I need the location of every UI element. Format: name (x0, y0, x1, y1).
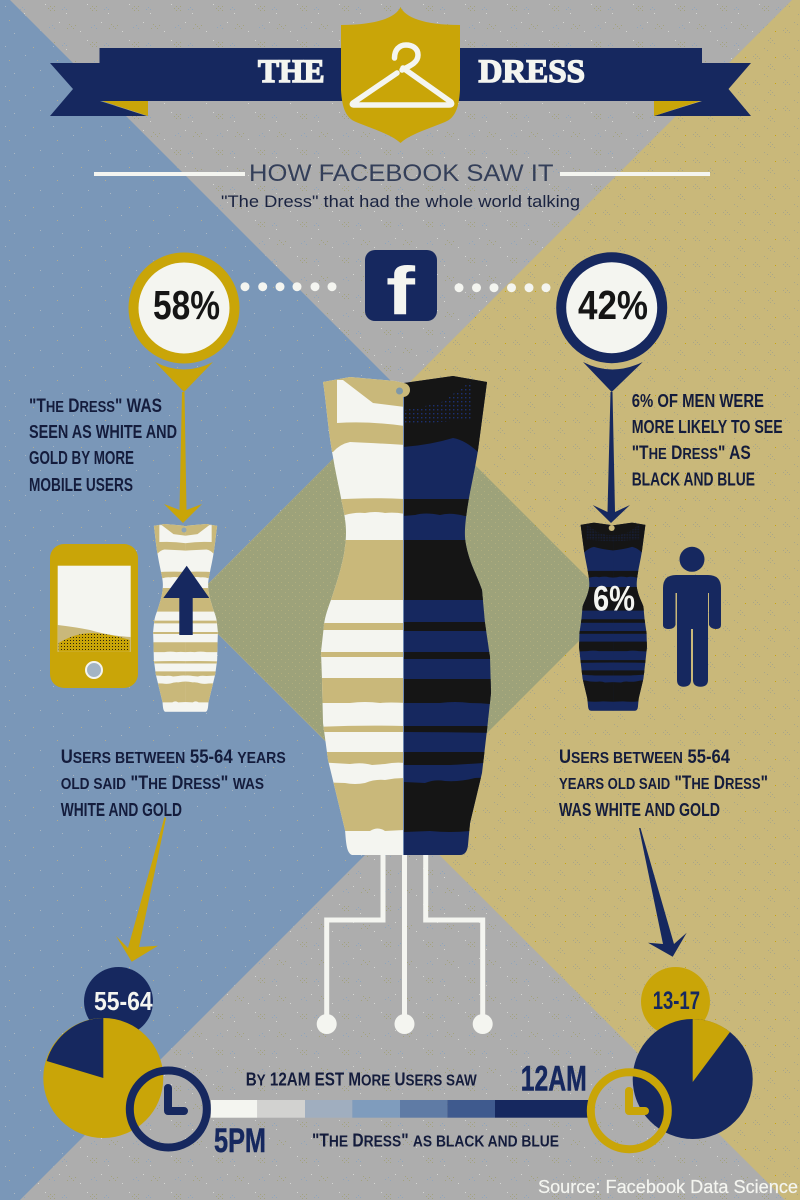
arrow: to 13-17 pie (639, 828, 687, 957)
text: users 55-64 right (559, 747, 768, 820)
arrow: to 55-64 pie (116, 817, 166, 962)
pie chart: 55-64 (43, 967, 163, 1138)
icon: man (663, 547, 721, 687)
text: mobile users: MOBILE USERS (29, 475, 133, 495)
text: users 55-64 left: OLD SAID "THE DRESS" WAS (61, 773, 264, 794)
clock: 5PM (130, 1070, 207, 1148)
icon: clothes hanger (352, 45, 452, 105)
text: mobile users: SEEN AS WHITE AND (29, 422, 177, 442)
text: men: 6% OF MEN WERE (632, 391, 764, 411)
dress stand legs (317, 855, 493, 1034)
timeline bar (211, 1100, 589, 1118)
label: 6 percent: 6% (593, 580, 635, 619)
age badge: 55-64: 55-64 (94, 986, 153, 1016)
text: users 55-64 right: YEARS OLD SAID "THE DRESS" (559, 773, 768, 794)
arrow: 58 percent to mobile dress (164, 392, 202, 523)
text: mobile users (29, 396, 177, 495)
title word: DRESS: DRESS (478, 54, 585, 90)
label: 12AM: 12AM (521, 1060, 587, 1099)
clock: 12AM (591, 1072, 668, 1149)
text: users 55-64 left: USERS BETWEEN 55-64 YEARS (61, 747, 286, 768)
age badge: 55-64 (84, 967, 153, 1036)
small dress: black and blue (576, 520, 650, 713)
label: 5PM: 5PM (214, 1122, 266, 1160)
dress right half (403, 370, 498, 860)
text: men (632, 391, 783, 490)
arrow: up (163, 566, 209, 635)
shield (341, 7, 460, 143)
text: men: "THE DRESS" AS (632, 443, 751, 464)
dotted connector left (240, 282, 336, 291)
heading: how facebook saw it: HOW FACEBOOK SAW IT (249, 160, 554, 187)
age badge: 13-17: 13-17 (653, 987, 700, 1015)
text: by 12am: BY 12AM EST MORE USERS SAW (246, 1070, 477, 1090)
main dress: half white and gold, half black and blue (315, 370, 498, 860)
pie chart: 13-17 (633, 967, 753, 1139)
text: mobile users: GOLD BY MORE (29, 448, 134, 468)
ribbon right tail (654, 63, 751, 116)
text: mobile users: "THE DRESS" WAS (29, 396, 162, 417)
text: users 55-64 right: WAS WHITE AND GOLD (559, 800, 720, 820)
dress left half (315, 370, 405, 860)
ribbon main band (100, 48, 702, 101)
ribbon left tail (50, 63, 147, 116)
text: the dress as black and blue: "THE DRESS" AS BLACK AND BLUE (312, 1131, 559, 1151)
source credit: Source: Facebook Data Science (538, 1177, 798, 1197)
ribbon folds (102, 101, 700, 116)
callout: 42 percent (561, 257, 662, 392)
callout: 58 percent: 58% (153, 282, 220, 328)
icon: facebook: f (386, 253, 415, 329)
text: men: BLACK AND BLUE (632, 470, 755, 490)
text: users 55-64 right: USERS BETWEEN 55-64 (559, 747, 730, 768)
age badge: 13-17 (641, 967, 710, 1036)
icon: facebook (365, 250, 437, 329)
title banner (50, 7, 751, 143)
callout: 58 percent (134, 258, 234, 392)
text: users 55-64 left (61, 747, 286, 820)
callout: 42 percent: 42% (578, 282, 648, 328)
subtitle: "The Dress" that had the whole world talking (221, 193, 580, 211)
text: users 55-64 left: WHITE AND GOLD (61, 800, 182, 820)
arrow: 42 percent to men dress (593, 392, 630, 523)
icon: mobile phone (50, 544, 138, 688)
dotted connector right (454, 283, 550, 292)
title word: THE: THE (258, 54, 324, 90)
small dress: white and gold (151, 521, 220, 714)
heading: how facebook saw it (94, 160, 710, 187)
